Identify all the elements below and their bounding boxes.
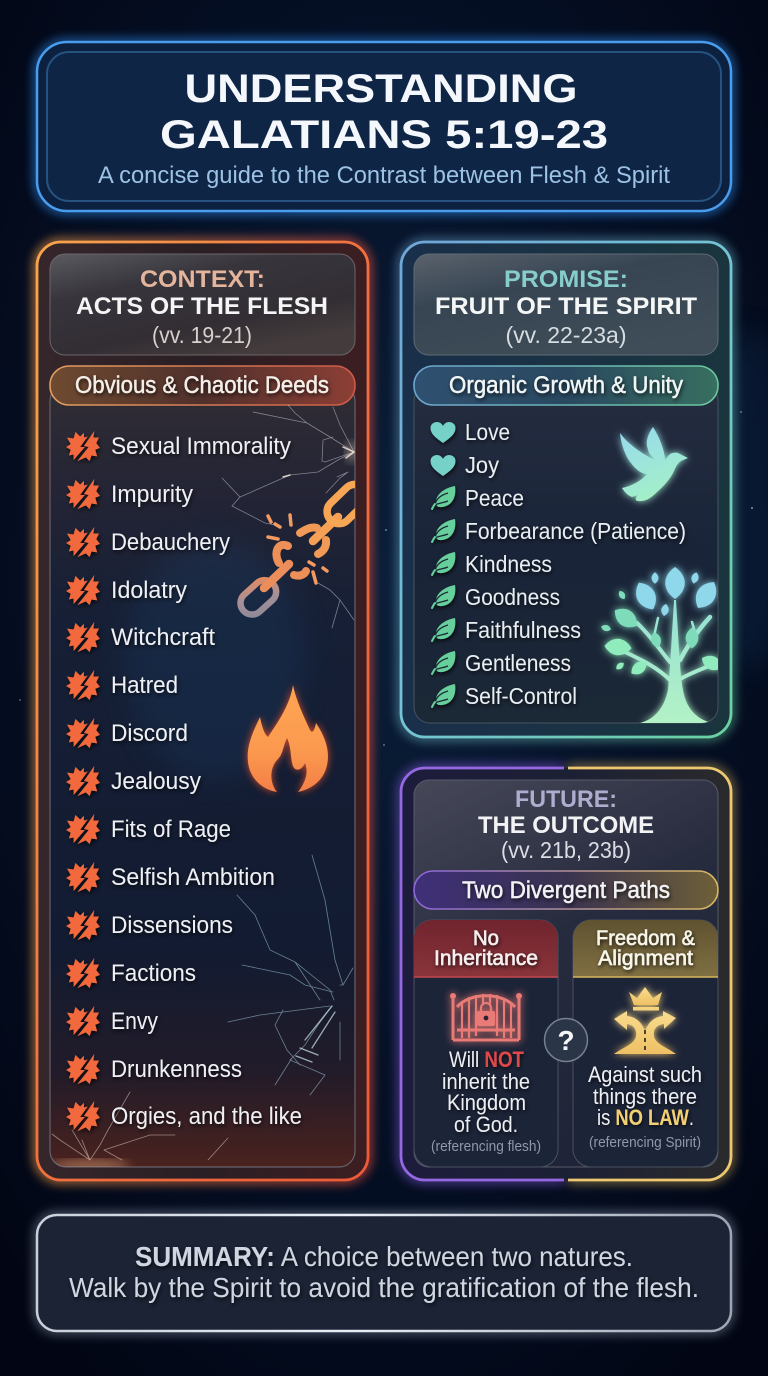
heading card	[414, 780, 718, 1167]
card title: Freedom &	[596, 927, 695, 950]
item: forbearance: Forbearance (Patience)	[465, 518, 686, 544]
icon: crown and forked road	[614, 987, 676, 1054]
item: dissensions	[66, 910, 233, 940]
item: jealousy	[66, 766, 201, 796]
subtitle pill	[50, 366, 355, 405]
card text: is NO LAW.	[597, 1105, 694, 1130]
item: envy: Envy	[111, 1008, 158, 1035]
panel: the outcome	[401, 768, 731, 1180]
item: fits of rage	[66, 814, 231, 844]
item: peace: Peace	[465, 485, 524, 511]
item: discord	[66, 718, 188, 748]
item: kindness: Kindness	[465, 551, 552, 577]
subtitle pill: Organic Growth & Unity	[449, 372, 683, 399]
card title: Inheritance	[434, 947, 538, 970]
list card	[50, 385, 355, 1167]
subtitle pill	[414, 871, 718, 909]
item: goodness	[432, 584, 560, 610]
heading outcome: THE OUTCOME	[478, 812, 654, 839]
card note: (referencing Spirit)	[589, 1135, 701, 1151]
item: discord: Discord	[111, 720, 188, 747]
heading context: CONTEXT:	[140, 266, 265, 293]
icon: question badge: ?	[557, 1025, 575, 1056]
heading promise: PROMISE:	[504, 266, 628, 293]
card note: (referencing flesh)	[431, 1139, 541, 1155]
item: sexual immorality: Sexual Immorality	[111, 433, 291, 460]
title line 1: UNDERSTANDING	[184, 67, 578, 111]
item: witchcraft: Witchcraft	[111, 624, 215, 651]
card text: of God.	[454, 1112, 518, 1137]
card title	[596, 927, 695, 970]
item: drunkenness	[66, 1054, 242, 1084]
icon: broken chain	[237, 480, 355, 618]
item: idolatry: Idolatry	[111, 577, 187, 604]
card text: Kingdom	[447, 1090, 526, 1115]
item: selfish ambition	[66, 862, 275, 892]
heading future: FUTURE:	[515, 786, 617, 813]
item: fits of rage: Fits of Rage	[111, 816, 231, 843]
heading acts: ACTS OF THE FLESH	[76, 293, 328, 320]
card: no inheritance	[414, 920, 558, 1167]
title panel	[37, 42, 731, 211]
item: witchcraft	[66, 622, 215, 652]
summary panel	[37, 1215, 731, 1331]
icon: flame	[248, 685, 328, 792]
card text	[442, 1047, 530, 1137]
panel: acts of the flesh	[37, 242, 372, 1180]
heading fruit: FRUIT OF THE SPIRIT	[435, 293, 697, 320]
item: orgies	[66, 1101, 302, 1131]
illustration: cracked glass	[50, 405, 358, 1170]
item: drunkenness: Drunkenness	[111, 1056, 242, 1083]
list: fruit of the spirit	[430, 419, 686, 709]
list card	[414, 385, 718, 723]
item: joy: Joy	[465, 452, 499, 478]
subtitle pill: Obvious & Chaotic Deeds	[75, 372, 329, 399]
panel: fruit of the spirit	[401, 242, 731, 737]
subtitle: A concise guide to the Contrast between Flesh & Spirit	[98, 162, 670, 189]
card text: things there	[593, 1084, 697, 1109]
card header	[573, 920, 718, 977]
icon: question badge	[544, 1018, 588, 1062]
item: hatred	[66, 670, 178, 700]
item: love	[430, 419, 510, 445]
card text	[588, 1062, 702, 1130]
item: selfish ambition: Selfish Ambition	[111, 864, 275, 891]
heading card	[414, 254, 718, 355]
card title	[434, 927, 538, 970]
item: goodness: Goodness	[465, 584, 560, 610]
heading card	[50, 254, 355, 355]
item: gentleness: Gentleness	[465, 650, 571, 676]
panel frame	[37, 242, 368, 1180]
item: orgies: Orgies, and the like	[111, 1103, 302, 1130]
verse range: (vv. 19-21)	[152, 322, 252, 348]
subtitle pill	[414, 366, 718, 405]
card title: Alignment	[598, 947, 693, 970]
verse range: (vv. 21b, 23b)	[501, 837, 631, 863]
card text: Will NOT	[449, 1047, 524, 1072]
item: peace	[432, 485, 524, 511]
summary line 2: Walk by the Spirit to avoid the gratification of the flesh.	[69, 1272, 699, 1303]
card text: Against such	[588, 1062, 702, 1087]
item: hatred: Hatred	[111, 672, 178, 699]
subtitle pill: Two Divergent Paths	[462, 877, 670, 904]
item: envy	[66, 1006, 158, 1036]
card text: inherit the	[442, 1069, 530, 1094]
title line 2: GALATIANS 5:19-23	[160, 113, 608, 157]
blue nebula	[125, 540, 305, 780]
icon: tree	[600, 567, 725, 723]
panel frame: flesh path	[401, 768, 564, 1180]
icon: locked gate	[450, 993, 522, 1040]
item: jealousy: Jealousy	[111, 768, 201, 795]
item: impurity: Impurity	[111, 481, 193, 508]
item: idolatry	[66, 575, 187, 605]
item: kindness	[432, 551, 552, 577]
summary line 1: SUMMARY: A choice between two natures.	[135, 1241, 633, 1272]
panel frame	[401, 242, 731, 737]
panel fill	[401, 768, 731, 1180]
card header	[414, 920, 558, 977]
item: debauchery: Debauchery	[111, 529, 230, 556]
item: debauchery	[66, 527, 230, 557]
item: sexual immorality	[66, 431, 291, 461]
item: dissensions: Dissensions	[111, 912, 233, 939]
panel frame: spirit path	[568, 768, 731, 1180]
item: self-control: Self-Control	[465, 683, 577, 709]
verse range: (vv. 22-23a)	[506, 322, 626, 348]
item: love: Love	[465, 419, 510, 445]
icon: dove	[620, 427, 688, 501]
card: freedom and alignment	[573, 920, 718, 1167]
item: impurity	[66, 479, 193, 509]
card title: No	[473, 927, 499, 950]
item: factions: Factions	[111, 960, 196, 987]
list: acts of the flesh	[66, 431, 302, 1131]
item: factions	[66, 958, 196, 988]
item: faithfulness: Faithfulness	[465, 617, 581, 643]
item: joy	[430, 452, 499, 478]
